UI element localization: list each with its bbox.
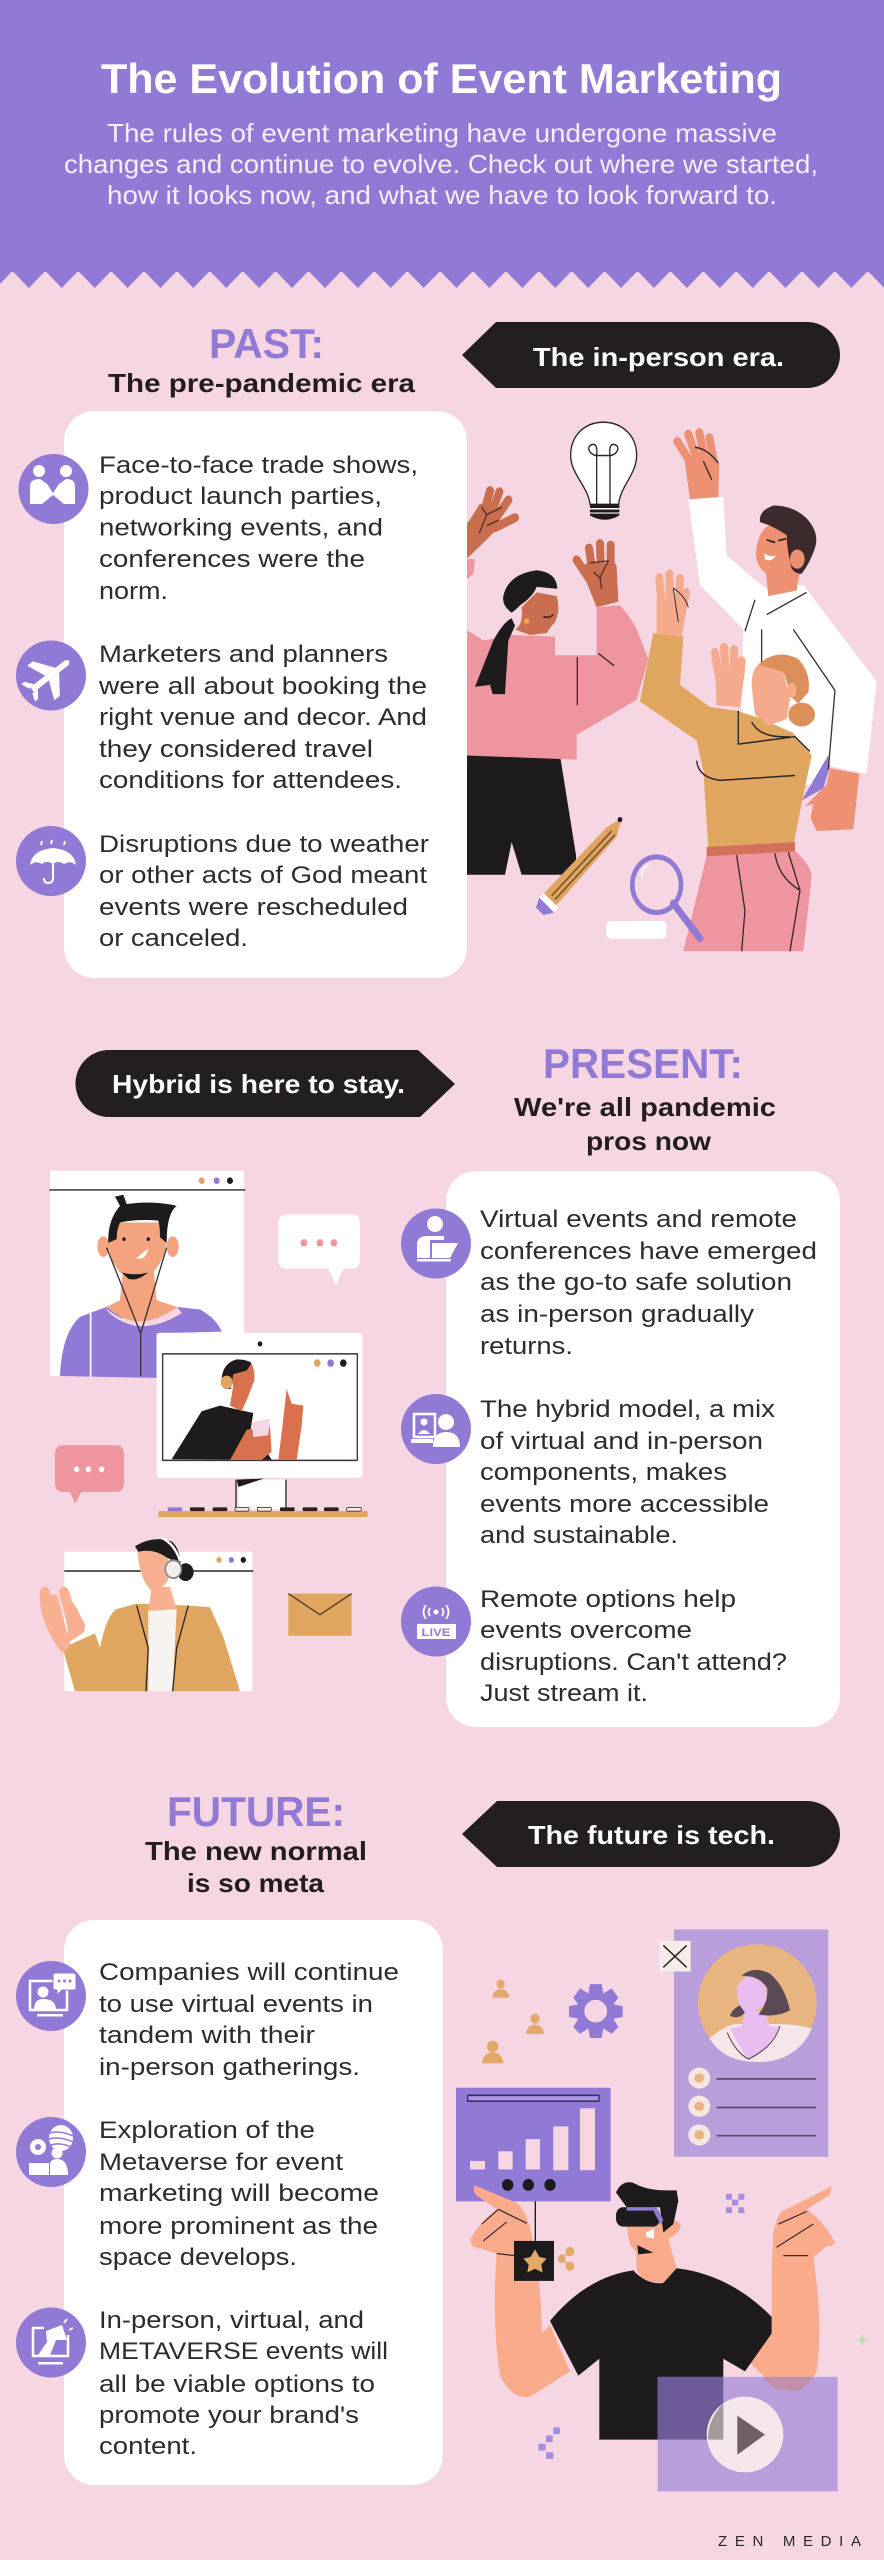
computer monitor xyxy=(157,1333,368,1517)
text: hybrid model: of virtual and in-person xyxy=(480,1428,763,1455)
text: exploration: marketing will become xyxy=(99,2180,379,2207)
text: disruptions: Disruptions due to weather xyxy=(99,831,429,858)
text: companies: Companies will continue xyxy=(99,1959,399,1986)
heading: future: The new normal xyxy=(145,1836,367,1866)
text: face-to-face: networking events, and xyxy=(99,514,383,542)
text: face-to-face: Face-to-face trade shows, xyxy=(99,452,418,479)
icon: live stream: LIVE xyxy=(422,1627,450,1639)
text: in-person virtual metaverse: promote your brand's xyxy=(99,2402,359,2429)
icon: gear xyxy=(569,1984,623,2038)
text: face-to-face: conferences were the xyxy=(99,546,365,573)
icon: handshake xyxy=(18,454,88,524)
heading: past xyxy=(108,320,416,398)
icon: person with laptop xyxy=(401,1208,471,1278)
heading: present: PRESENT: xyxy=(543,1040,743,1087)
text: face-to-face xyxy=(99,452,418,605)
text: virtual events xyxy=(480,1206,817,1360)
text: exploration: more prominent as the xyxy=(99,2213,378,2240)
text: exploration: Exploration of the xyxy=(99,2117,315,2144)
text: marketers and planners xyxy=(98,641,427,794)
pencil xyxy=(536,817,622,915)
green sparkle xyxy=(856,2334,870,2347)
text: companies: in-person gatherings. xyxy=(99,2054,360,2081)
intro text: how it looks now, and what we have to look forward to. xyxy=(107,180,777,210)
text: marketers and planners: conditions for attendees. xyxy=(99,767,402,794)
text: in-person virtual metaverse: METAVERSE events will xyxy=(99,2338,388,2365)
text: in-person virtual metaverse: In-person, virtual, and xyxy=(99,2307,364,2334)
text: marketers and planners: they considered travel xyxy=(99,736,373,763)
text: in-person virtual metaverse: content. xyxy=(99,2433,197,2460)
illustration: people high five xyxy=(460,422,877,951)
heading: future xyxy=(145,1788,367,1898)
text: virtual events: Virtual events and remote xyxy=(480,1206,797,1233)
woman in mustard xyxy=(640,574,815,951)
text: marketers and planners: were all about booking the xyxy=(98,673,427,700)
icon: megaphone monitor xyxy=(16,2308,86,2378)
icon: envelope xyxy=(288,1594,352,1636)
text: disruptions: or other acts of God meant xyxy=(99,862,427,889)
text: companies: to use virtual events in xyxy=(99,1991,373,2018)
woman in pink xyxy=(460,491,648,875)
text: remote options xyxy=(480,1586,787,1707)
white dash xyxy=(606,921,667,939)
text: virtual events: conferences have emerged xyxy=(480,1238,817,1265)
text: in-person virtual metaverse xyxy=(99,2307,388,2460)
pixel decoration xyxy=(538,2194,744,2459)
banner: hybrid is here to stay: Hybrid is here to stay. xyxy=(112,1069,405,1099)
icon: hybrid meeting xyxy=(401,1394,471,1464)
header banner xyxy=(0,0,884,288)
icon: share xyxy=(558,2247,574,2271)
text: disruptions: or canceled. xyxy=(99,925,248,952)
video player xyxy=(658,2377,838,2491)
text: virtual events: returns. xyxy=(480,1333,573,1360)
text: companies: tandem with their xyxy=(99,2022,315,2049)
text: hybrid model: events more accessible xyxy=(480,1491,769,1518)
text: marketers and planners: Marketers and planners xyxy=(99,641,388,668)
banner: the in-person era: The in-person era. xyxy=(533,342,784,372)
man with VR headset xyxy=(471,2182,835,2440)
panel: future xyxy=(16,1920,443,2485)
text: hybrid model: The hybrid model, a mix xyxy=(480,1396,775,1423)
panel: past xyxy=(15,411,467,978)
illustration: video call windows xyxy=(45,1171,368,1691)
text: disruptions: events were rescheduled xyxy=(99,894,408,921)
intro text xyxy=(64,118,818,210)
text: face-to-face: product launch parties, xyxy=(99,483,382,510)
text: exploration: space develops. xyxy=(99,2244,297,2271)
text: hybrid model: components, makes xyxy=(480,1459,727,1486)
text: in-person virtual metaverse: all be viable options to xyxy=(99,2371,375,2398)
banner: the future is tech: The future is tech. xyxy=(528,1820,775,1850)
heading: present: pros now xyxy=(586,1126,712,1156)
text: hybrid model: and sustainable. xyxy=(480,1522,678,1549)
text: remote options: Remote options help xyxy=(480,1586,736,1613)
video window: man with earphones xyxy=(49,1171,245,1378)
icon: airplane xyxy=(15,640,86,710)
man in white shirt xyxy=(677,433,877,831)
text: remote options: events overcome xyxy=(480,1617,692,1644)
panel: present xyxy=(401,1171,840,1727)
logo: zen media: ZEN MEDIA xyxy=(718,2533,861,2550)
banner: the future is tech xyxy=(462,1801,840,1867)
text: exploration xyxy=(99,2117,379,2271)
speech bubble: pink xyxy=(55,1445,124,1504)
heading: future: is so meta xyxy=(187,1868,325,1898)
banner: the in-person era xyxy=(462,322,840,388)
banner: hybrid is here to stay xyxy=(76,1050,455,1117)
title: The Evolution of Event Marketing xyxy=(101,55,782,102)
heading: past: PAST: xyxy=(209,320,324,367)
text: face-to-face: norm. xyxy=(99,578,168,605)
text: remote options: Just stream it. xyxy=(480,1680,648,1707)
intro text: The rules of event marketing have undergone massive xyxy=(107,118,777,148)
icons: people xyxy=(482,1980,544,2063)
text: marketers and planners: right venue and decor. And xyxy=(99,704,427,731)
heading: present: We're all pandemic xyxy=(514,1092,776,1122)
icon: virtual chat xyxy=(16,1961,86,2031)
text: hybrid model xyxy=(480,1396,775,1549)
icon: close box xyxy=(659,1941,691,1972)
text: virtual events: as the go-to safe solution xyxy=(480,1269,792,1296)
magnifying glass xyxy=(632,857,700,938)
text: virtual events: as in-person gradually xyxy=(480,1301,755,1328)
heading: future: FUTURE: xyxy=(167,1788,345,1835)
speech bubble: white xyxy=(278,1214,360,1285)
profile card xyxy=(674,1929,828,2157)
text: exploration: Metaverse for event xyxy=(99,2149,343,2176)
text: companies xyxy=(99,1959,399,2081)
star tag xyxy=(514,2201,554,2281)
bar chart panel xyxy=(456,2088,611,2201)
heading: past: The pre-pandemic era xyxy=(108,368,416,398)
icon: umbrella xyxy=(16,826,86,896)
icon: light bulb xyxy=(571,422,637,520)
text: disruptions xyxy=(99,831,429,952)
heading: present xyxy=(514,1040,776,1156)
intro text: changes and continue to evolve. Check out where we started, xyxy=(64,149,818,179)
icon: metaverse xyxy=(16,2117,86,2187)
illustration: VR man xyxy=(456,1929,870,2491)
icon: live stream xyxy=(401,1586,471,1656)
video window: woman with headset xyxy=(45,1538,253,1691)
text: remote options: disruptions. Can't attend? xyxy=(480,1649,787,1676)
